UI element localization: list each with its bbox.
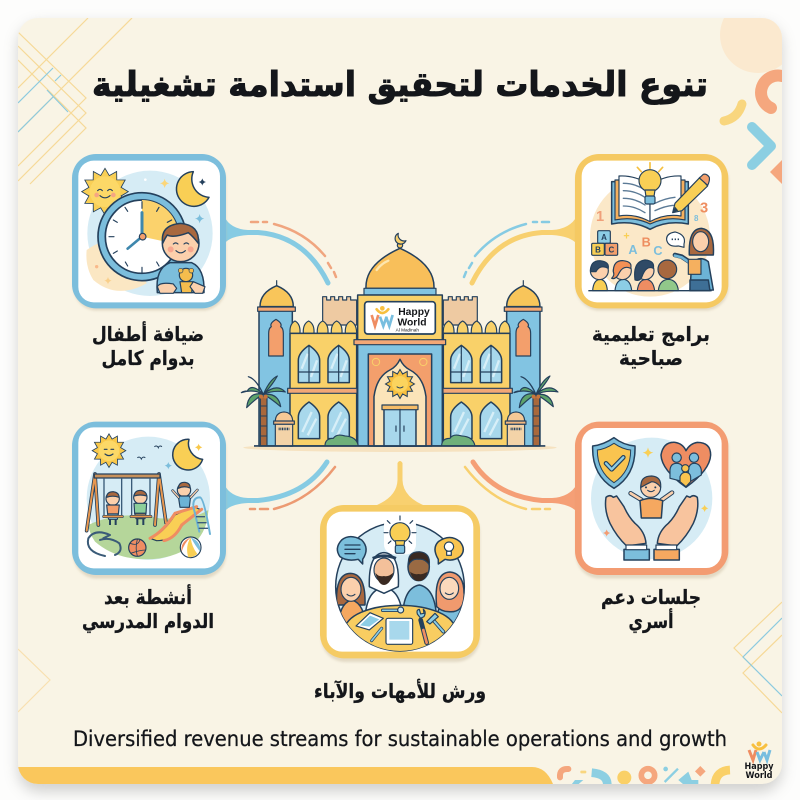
panel shadow <box>321 509 480 662</box>
palm trees <box>241 376 558 446</box>
speech bubble: left <box>337 537 366 564</box>
connector: top-left <box>224 216 336 283</box>
panel: morning education programs <box>575 154 729 311</box>
icon: alphabet blocks: B <box>595 245 601 254</box>
icon: moon <box>173 439 203 470</box>
decoration: top-right shapes <box>720 18 782 184</box>
speech bubble <box>667 232 684 247</box>
label: family support: أسري <box>628 607 674 634</box>
label: parent workshops: ورش للأمهات والآباء <box>314 678 486 703</box>
label: after-school activities <box>82 583 214 634</box>
figure: child on swing 2 <box>130 490 152 525</box>
sign: Happy World Al Madinah: Al Madinah <box>396 327 419 332</box>
icon: moon <box>176 172 209 206</box>
figure: child on slide <box>173 482 197 507</box>
ball <box>129 539 146 556</box>
label: full-day childcare: ضيافة أطفال <box>92 320 204 346</box>
logo: Happy World: Happy <box>744 762 774 772</box>
label: family support: جلسات دعم <box>601 585 701 609</box>
label: morning programs: برامج تعليمية <box>592 322 710 346</box>
sparkles <box>603 447 708 537</box>
numbers and letters: 8 <box>694 214 699 223</box>
icon: open book <box>612 176 688 229</box>
person: woman in hijab <box>436 572 464 623</box>
icon: alphabet blocks <box>592 231 618 255</box>
bushes <box>325 435 475 446</box>
panel: full-day childcare <box>72 154 226 311</box>
central building illustration <box>241 233 558 452</box>
footer band <box>18 767 553 784</box>
sign: Happy World Al Madinah <box>365 302 435 334</box>
slide <box>150 497 210 541</box>
swing set <box>87 474 166 531</box>
icon: shield <box>593 438 635 488</box>
panel inner <box>582 161 722 302</box>
icon: sun <box>82 168 128 215</box>
icon: left hand <box>605 496 649 560</box>
panel inner <box>327 512 473 652</box>
panel frame <box>320 505 480 658</box>
panel frame <box>72 422 226 575</box>
numbers and letters: C <box>653 244 662 258</box>
title: تنوع الخدمات لتحقيق استدامة تشغيلية <box>92 65 708 105</box>
panel inner <box>582 428 722 568</box>
figure: boy with teddy <box>157 223 205 293</box>
panel: family support sessions <box>575 422 729 579</box>
figure: child on swing 1 <box>103 492 123 525</box>
panel shadow <box>576 157 729 311</box>
central dome <box>364 233 436 295</box>
sun emblem <box>386 370 414 398</box>
panel inner <box>78 161 220 302</box>
label: morning programs: صباحية <box>619 346 683 370</box>
icon: pencil <box>673 174 709 213</box>
speech bubble: right <box>435 537 463 564</box>
floor line <box>588 289 712 293</box>
panel shadow <box>576 425 729 579</box>
panel frame <box>575 422 728 575</box>
scene circle <box>336 522 464 651</box>
panel inner <box>78 427 220 568</box>
decoration: right chevrons <box>734 602 782 713</box>
figure: teacher <box>675 228 714 291</box>
icon: heart with family <box>661 442 711 487</box>
label: after-school activities: أنشطة بعد <box>104 583 192 609</box>
numbers and letters: 1 <box>596 209 604 225</box>
label: after-school activities: الدوام المدرسي <box>82 609 214 634</box>
person: man in blue <box>403 551 437 611</box>
entrance doors <box>382 405 418 446</box>
panel: after-school activities <box>72 422 226 579</box>
icon: light bulb <box>384 515 416 554</box>
sky and grass <box>87 437 210 560</box>
panel frame <box>575 154 728 308</box>
numbers and letters <box>596 201 708 258</box>
panel: parent workshops <box>320 505 480 662</box>
label: family support <box>601 585 701 634</box>
left wing <box>288 321 357 446</box>
numbers and letters: A <box>628 243 637 257</box>
ground shadow <box>243 443 557 452</box>
table items <box>356 607 443 644</box>
panel frame <box>72 154 226 308</box>
sparkles <box>95 178 206 284</box>
connector: bottom-left <box>224 462 335 512</box>
icon: clock <box>98 193 186 281</box>
numbers and letters: + <box>623 230 630 242</box>
back walls <box>323 297 477 325</box>
table <box>345 605 455 653</box>
numbers and letters: 3 <box>700 201 708 217</box>
person: man in ghutra <box>365 552 402 610</box>
right wing <box>443 321 512 446</box>
kiosks <box>274 412 526 446</box>
people and table <box>337 552 464 653</box>
label: full-day childcare: بدوام كامل <box>102 346 194 370</box>
right tower <box>504 281 542 446</box>
figure: child <box>631 476 672 518</box>
beach ball <box>180 537 201 558</box>
backdrop circles <box>86 171 213 296</box>
connector: bottom-center <box>372 461 428 507</box>
person: woman left <box>337 573 366 630</box>
numbers and letters: B <box>642 236 651 250</box>
icon: sun <box>92 434 126 467</box>
icon: alphabet blocks: A <box>601 233 607 242</box>
icon: right hand <box>654 496 698 560</box>
connector: bottom-right <box>465 462 577 512</box>
sign: Happy World Al Madinah: World <box>397 317 427 328</box>
skipping rope <box>88 532 121 556</box>
icon: light bulb <box>637 163 663 204</box>
sign: Happy World Al Madinah: Happy <box>398 307 430 318</box>
label: full-day childcare <box>92 320 204 370</box>
backdrop circle <box>591 438 712 559</box>
figures: children <box>590 260 678 291</box>
connector: top-right <box>464 216 577 283</box>
footer shapes <box>560 766 730 785</box>
icon: alphabet blocks: C <box>608 245 614 254</box>
panel shadow <box>73 157 226 311</box>
panel shadow <box>73 425 226 579</box>
label: morning programs <box>592 322 710 370</box>
left tower <box>258 281 295 446</box>
birds and sparkles <box>137 444 202 469</box>
decoration: left chevron <box>18 649 50 712</box>
logo: Happy World: World <box>746 771 772 781</box>
decoration: top-left line pattern <box>18 18 132 184</box>
base line <box>254 443 545 448</box>
logo: Happy World <box>744 742 774 781</box>
backdrop circle <box>590 177 710 297</box>
central block <box>354 295 446 446</box>
tagline: Diversified revenue streams for sustainable operations and growth <box>73 727 727 751</box>
